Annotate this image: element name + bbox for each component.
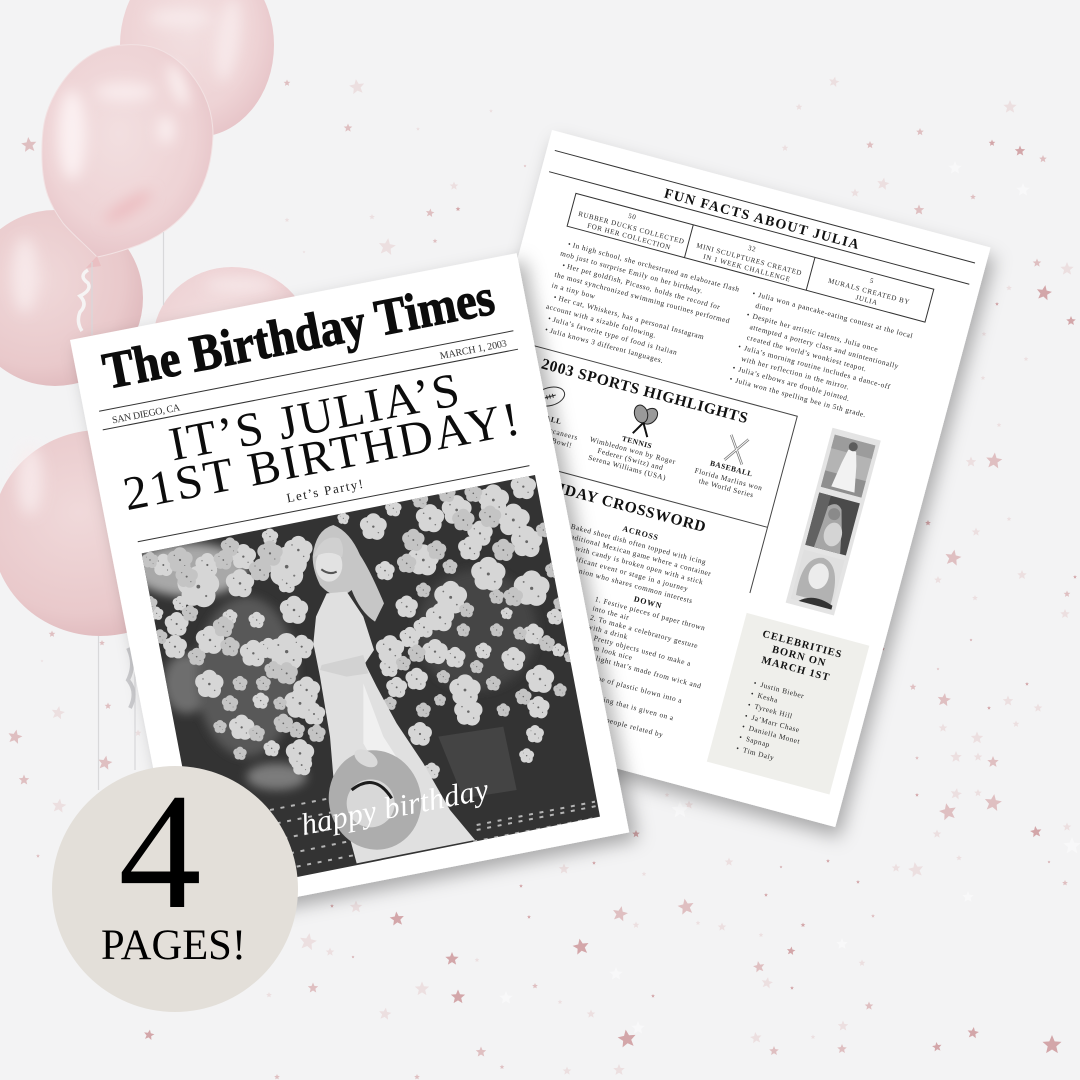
celebrities list: • — [753, 678, 758, 688]
balloons — [0, 0, 311, 790]
section rules — [459, 338, 797, 593]
crossword across clues: 4. A companion who shares common interests — [541, 556, 694, 605]
location: SAN DIEGO, CA — [111, 402, 182, 426]
sport: football: FOOTBALL — [516, 406, 563, 426]
masthead and headline — [87, 266, 540, 544]
heading: fun facts: FUN FACTS ABOUT JULIA — [662, 187, 861, 253]
fun facts right column: • — [729, 374, 734, 384]
celebrities heading: MARCH 1ST — [760, 655, 831, 684]
balloon highlights — [12, 0, 275, 515]
subheadline: Let’s Party! — [285, 476, 366, 505]
curled ribbon — [78, 270, 89, 331]
crossword across clues: filled with candy is broken open with a stick — [554, 538, 704, 586]
sport: baseball: Florida Marlins won — [694, 466, 764, 493]
icon: football — [533, 384, 567, 409]
fun facts right column: Despite her artistic talents, Julia once — [752, 311, 879, 354]
fun facts right column: • — [732, 363, 737, 373]
stats box: 32 — [747, 244, 757, 254]
celebrities list: • — [741, 722, 746, 731]
celebrities heading — [755, 629, 843, 685]
fun facts left column: Julia’s favorite type of food is Italian — [552, 315, 678, 357]
fun facts left column — [539, 238, 741, 379]
crossword across clues — [541, 506, 718, 608]
crossword across clues: 3. A significant event or stage in a journey — [546, 547, 689, 593]
headline: 21ST BIRTHDAY! — [119, 392, 524, 521]
stats box: RUBBER DUCKS COLLECTED — [577, 210, 685, 246]
stats box: FOR HER COLLECTION — [586, 222, 672, 252]
headline: IT’S JULIA’S — [165, 363, 464, 471]
heading: crossword: BIRTHDAY CROSSWORD — [512, 468, 707, 536]
stats box: 50 — [627, 212, 637, 222]
crossword down clues: 7. Group of people related by — [565, 704, 664, 739]
fun facts right column: Julia’s morning routine includes a dance-off — [743, 343, 892, 391]
strip photo 1 — [821, 435, 875, 498]
fun facts right column: diner — [754, 301, 774, 314]
fun facts right column — [729, 289, 914, 426]
celebrities list: Justin Bieber — [759, 680, 805, 700]
crossword down clues: 1. Festive pieces of paper thrown — [594, 594, 706, 633]
fun facts right column: Julia won a pancake-eating contest at the local — [757, 290, 914, 340]
balloon: main front — [42, 45, 213, 268]
stats box: JULIA — [855, 293, 879, 307]
date: MARCH 1, 2003 — [439, 338, 508, 362]
crossword down clues: DOWN — [633, 594, 663, 611]
celebrities list: Sapnap — [745, 734, 771, 749]
fun facts left column: account with a sizable following. — [545, 302, 657, 340]
celebrities list: • — [738, 732, 744, 742]
balloon: lower left — [0, 430, 208, 636]
lower ribbon — [128, 648, 134, 708]
fun facts left column: in a tiny bow — [551, 280, 597, 301]
pages label: PAGES! — [101, 922, 246, 969]
photo background — [142, 475, 600, 877]
sport: football: won the Super Bowl! — [501, 422, 573, 450]
celebrities list: • — [744, 711, 749, 721]
main photo — [142, 475, 600, 877]
badge circle — [52, 766, 298, 1012]
page count badge — [52, 759, 298, 1012]
celebrities list: Ja’Marr Chase — [751, 713, 801, 734]
bangs — [313, 537, 343, 557]
fun facts right column: created the world’s wonkiest teapot. — [746, 333, 868, 373]
stats box: MURALS CREATED BY — [827, 277, 911, 306]
sleeve detail — [320, 655, 368, 677]
icon: baseball bats — [724, 435, 749, 465]
hat crown — [347, 779, 395, 827]
sport: tennis: TENNIS — [621, 434, 653, 451]
smile — [321, 569, 337, 573]
crossword down clues: 6. Something that is given on a — [569, 686, 675, 722]
celebrities heading: CELEBRITIES — [761, 629, 843, 661]
celebrities list — [735, 678, 813, 768]
balloon: behind front page — [153, 267, 311, 415]
fun facts left column: Her cat, Whiskers, has a personal Instagram — [558, 294, 705, 341]
crossword down clues — [562, 585, 720, 755]
balloon strings — [92, 232, 164, 790]
masthead title: The Birthday Times — [98, 269, 499, 401]
sport: baseball — [691, 455, 766, 501]
flowers — [150, 474, 565, 779]
heading: sports: 2003 SPORTS HIGHLIGHTS — [539, 356, 750, 427]
celebrities list: • — [750, 689, 755, 698]
front page — [70, 253, 630, 919]
crossword down clues: shape — [572, 677, 593, 691]
crossword down clues: wax — [577, 659, 592, 671]
woman — [313, 525, 475, 863]
back page sheet — [397, 130, 991, 827]
crossword across clues: ACROSS — [622, 524, 660, 542]
face — [316, 553, 342, 582]
crossword down clues: 2. To make a celebratory gesture — [589, 613, 699, 650]
crossword down clues: marriage — [562, 714, 593, 730]
hat band — [352, 783, 392, 798]
crossword down clues: 4. A light that’s made from wick and — [579, 649, 703, 690]
stats box: 5 — [869, 277, 875, 285]
photo strip — [786, 428, 881, 616]
celebrities list: Daniella Monet — [748, 724, 801, 746]
crossword down clues: room look nice — [582, 640, 634, 662]
sport: football: Tampa Bay Buccaneers — [500, 413, 579, 442]
sport: football — [498, 402, 582, 451]
fun facts left column: • — [561, 260, 567, 270]
fun facts right column: Julia’s elbows are double jointed. — [737, 365, 851, 403]
planters — [438, 727, 517, 798]
sport: tennis — [584, 426, 679, 484]
crossword down clues: 5. A type of plastic blown into a — [574, 668, 684, 705]
crossword across clues: 1. Baked sheet dish often topped with icing — [561, 519, 707, 566]
dress shading — [364, 684, 396, 756]
dress — [313, 592, 475, 863]
fun facts left column: In high school, she orchestrated an elaborate flash — [572, 240, 741, 294]
fun facts right column: with her reflection in the mirror. — [740, 354, 850, 392]
smaller flowers — [142, 484, 576, 760]
soft foliage tones — [133, 543, 537, 790]
icon: tennis rackets — [625, 401, 662, 442]
back page content — [412, 150, 975, 795]
masthead rules — [99, 331, 540, 544]
fun facts left column: • — [567, 239, 572, 249]
stats box: IN 1 WEEK CHALLENGE — [702, 253, 791, 284]
hair back — [313, 525, 384, 622]
celebrities list: • — [747, 700, 752, 709]
celebrities list: Tyreek Hill — [754, 702, 794, 721]
script text: happy birthday — [298, 772, 492, 842]
fun facts left column: • — [553, 292, 558, 302]
fun facts right column: attempted a pottery class and unintentionally — [749, 322, 900, 371]
balloon: top back — [120, 0, 274, 137]
header rules — [549, 150, 975, 284]
fun facts left column: mob just to surprise Emily on her birthday. — [559, 249, 704, 295]
celebrities list: Tim Daly — [742, 745, 775, 762]
crossword down clues: with a drink — [587, 622, 629, 641]
fun facts right column: • — [751, 289, 757, 298]
ground petals — [270, 792, 598, 867]
celebrities heading: BORN ON — [771, 644, 827, 669]
celebrities list: • — [735, 743, 741, 753]
sport: tennis: Serena Williams (USA) — [587, 453, 667, 482]
fun facts left column: Her pet goldfish, Picasso, holds the record for — [566, 262, 722, 311]
stats box — [567, 193, 934, 322]
fun facts right column: Julia won the spelling bee in 5th grade. — [734, 376, 867, 419]
back page — [397, 130, 991, 827]
sport: baseball: the World Series — [698, 476, 755, 499]
sport: tennis: Wimbledon won by Roger — [589, 435, 677, 466]
fun facts left column: Julia knows 3 different languages. — [549, 326, 665, 365]
sport: tennis: Federer (Switz) and — [597, 446, 664, 472]
number 4: 4 — [118, 759, 202, 943]
balloon: left — [0, 210, 143, 386]
stats box: MINI SCULPTURES CREATED — [695, 241, 803, 277]
hat — [328, 750, 422, 850]
celebrities list: Kesha — [757, 691, 779, 705]
front page sheet — [70, 253, 629, 919]
crossword down clues: birthday — [567, 695, 597, 711]
fun facts left column: • — [547, 314, 552, 323]
crossword across clues: 2. A traditional Mexican game where a container — [549, 526, 712, 578]
strip photo 3 — [791, 550, 845, 610]
strip photo 2 — [805, 493, 860, 556]
fun facts right column: • — [737, 342, 743, 351]
crossword down clues: 3. Pretty objects used to make a — [584, 631, 692, 668]
fun facts right column: • — [746, 310, 751, 319]
sport: baseball: BASEBALL — [709, 458, 754, 479]
hand — [354, 750, 378, 768]
fun facts left column: the most synchronized swimming routines performed — [554, 270, 731, 325]
panel: celebrities — [707, 613, 869, 794]
crossword down clues: into the air — [592, 603, 630, 622]
fun facts left column: • — [544, 325, 549, 334]
